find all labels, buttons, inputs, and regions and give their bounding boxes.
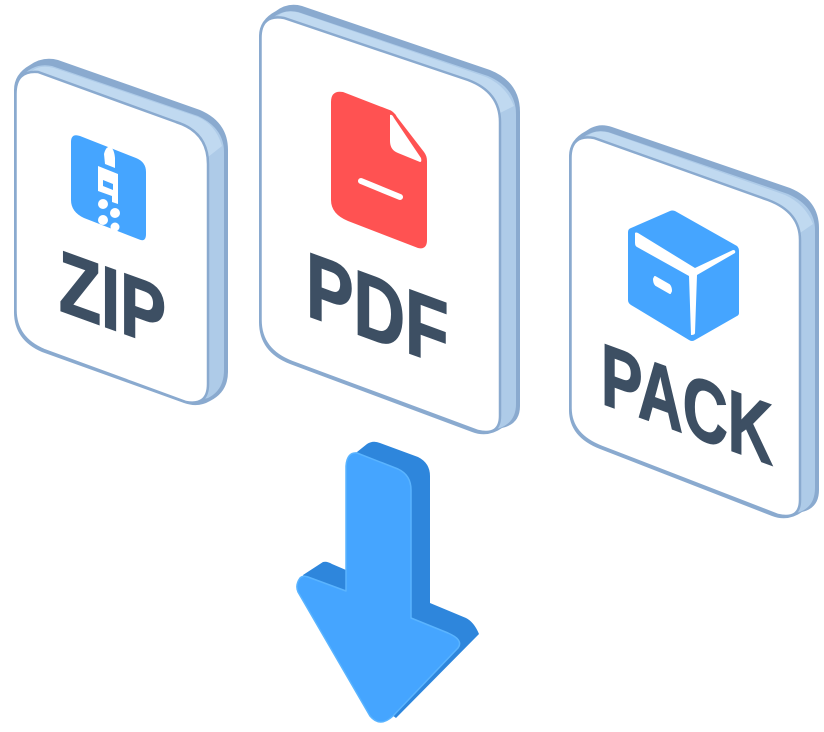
label: ZIP: ZIP (59, 232, 166, 368)
icon: box (628, 210, 739, 341)
card top bevel (30, 67, 222, 157)
arrow: download (297, 442, 479, 722)
icon: zip (71, 135, 146, 240)
card side (576, 131, 815, 516)
card top bevel (276, 11, 514, 113)
card side (20, 65, 224, 402)
label: PDF: PDF (306, 232, 449, 387)
card side (266, 11, 516, 432)
arrow depth (303, 442, 479, 718)
label: PACK: PACK (601, 325, 773, 485)
panel: PDF file card (259, 5, 520, 434)
card top bevel (586, 131, 813, 233)
card edge (14, 59, 228, 405)
card edge (259, 5, 520, 434)
card face (570, 137, 800, 516)
card edge (569, 125, 819, 518)
arrow face (297, 453, 460, 722)
card face (16, 72, 208, 403)
panel: ZIP file card (14, 59, 228, 405)
panel: PACK file card (569, 125, 819, 518)
card face (260, 17, 500, 432)
icon: PDF document (331, 92, 427, 248)
